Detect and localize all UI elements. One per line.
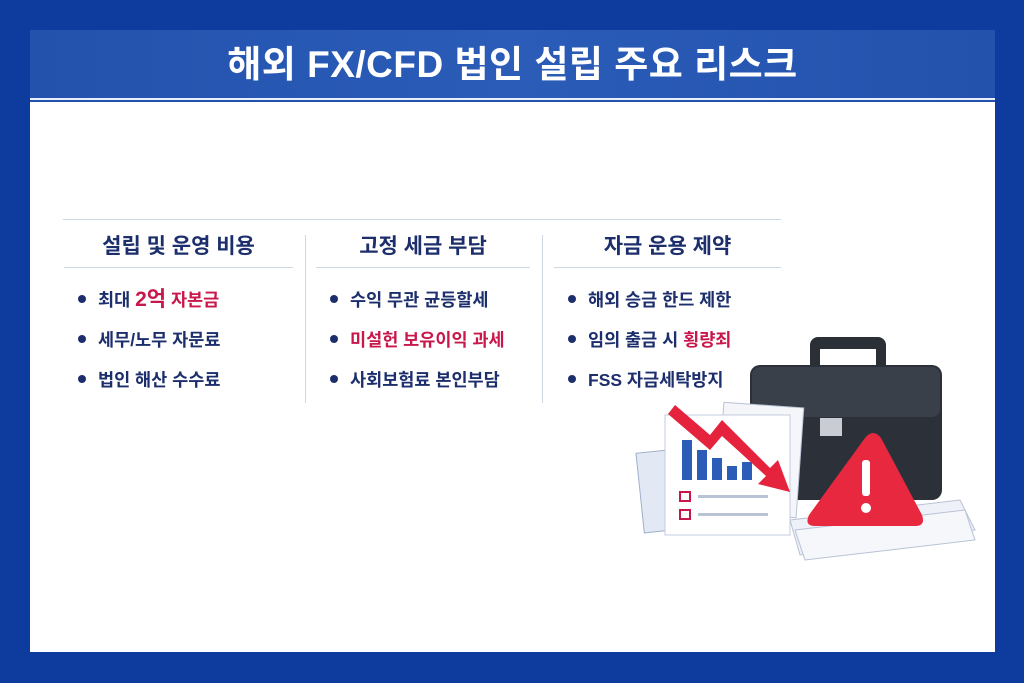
column: 설립 및 운영 비용: 세무/노무 자문료 <box>98 330 220 350</box>
icon: report documents <box>636 402 804 535</box>
column: 고정 세금 부담: 수익 무관 균등할세 <box>350 290 489 310</box>
icon: warning triangle <box>807 433 923 526</box>
arrow: falling red arrow <box>668 405 790 492</box>
icon: briefcase <box>750 337 942 500</box>
column: 고정 세금 부담: 미설헌 보유이익 과세 <box>350 330 505 350</box>
column: 설립 및 운영 비용 <box>64 235 293 390</box>
title bar <box>30 30 995 100</box>
column: 고정 세금 부담: 고정 세금 부담 <box>359 235 487 258</box>
icon: paper stack <box>790 500 975 560</box>
column: 고정 세금 부담: 사회보험료 본인부담 <box>350 370 500 390</box>
column: 자금 운용 제약: 자금 운용 제약 <box>604 235 731 258</box>
title bar: 해외 FX/CFD 법인 설립 주요 리스크 <box>227 44 798 85</box>
column: 자금 운용 제약: 임의 출금 시 횡량죄 <box>588 330 731 350</box>
illustration: briefcase, documents, falling arrow, warning <box>636 337 976 560</box>
column: 설립 및 운영 비용: 법인 해산 수수료 <box>98 370 220 390</box>
column: 자금 운용 제약: 해외 승금 한드 제한 <box>588 290 731 310</box>
column: 자금 운용 제약: FSS 자금세탁방지 <box>588 370 724 390</box>
column: 자금 운용 제약 <box>554 235 781 390</box>
top divider <box>63 219 781 220</box>
column: 설립 및 운영 비용: 최대 2억 자본금 <box>98 288 219 311</box>
column: 고정 세금 부담 <box>316 235 530 390</box>
column: 설립 및 운영 비용: 설립 및 운영 비용 <box>102 235 255 258</box>
